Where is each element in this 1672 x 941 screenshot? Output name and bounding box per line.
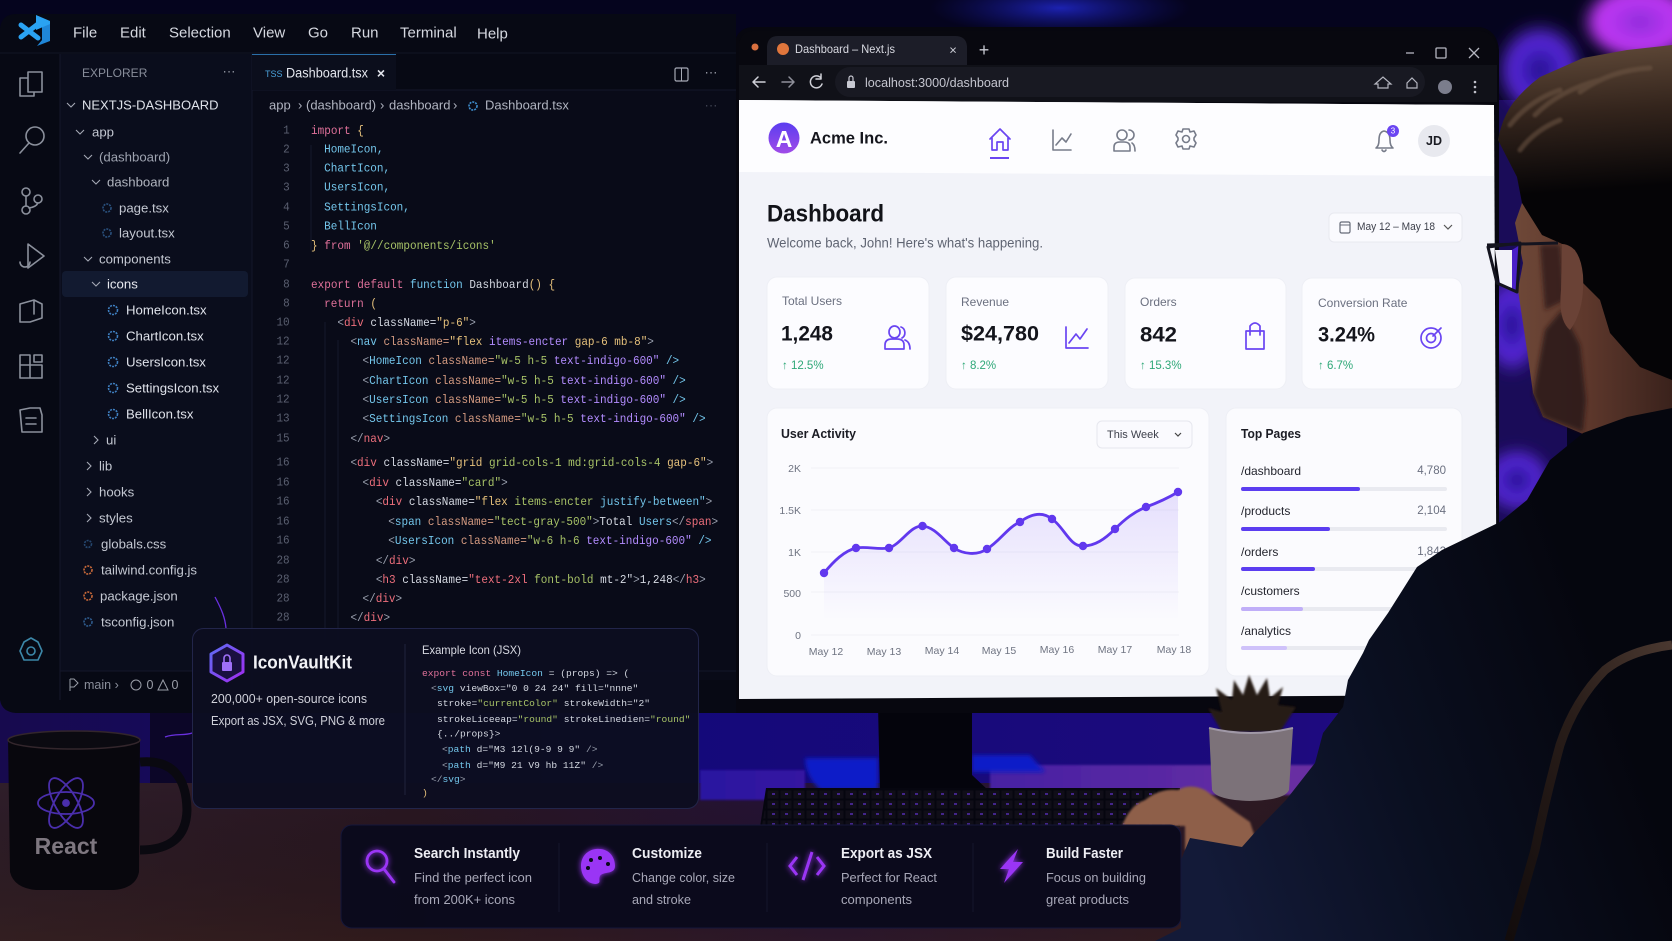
feature: Build Faster: Focus on building (1046, 871, 1146, 885)
lit desk edge (700, 765, 1340, 800)
line numbers: 1 (283, 124, 290, 138)
source lines: <ChartIcon className="w-5 h-5 text-indigo-600" /> (363, 374, 686, 388)
source lines: UsersIcon, (324, 181, 390, 195)
logo: Acme Inc.: Acme Inc. (810, 128, 888, 148)
row: /customers (1241, 584, 1447, 611)
status bar: main › (84, 678, 119, 692)
example code: {../props}> (437, 728, 501, 740)
explorer header: EXPLORER (82, 66, 148, 80)
stat card: Conversion Rate: ↑ 6.7% (1318, 360, 1353, 372)
icon: chart (1066, 327, 1088, 348)
row: /orders: 1,842 (1417, 546, 1446, 558)
hoodie body (1155, 408, 1672, 941)
nav icon: users (1114, 130, 1135, 151)
dropdown: This Week: This Week (1107, 429, 1159, 441)
nav icon: gear (1176, 129, 1196, 149)
feature bar (341, 825, 1181, 928)
menu bar: Go (308, 24, 328, 42)
feature: Customize: Change color, size (632, 871, 735, 885)
line numbers: 12 (276, 374, 290, 388)
coffee mug with React logo: React (35, 833, 98, 859)
file tree: icons (107, 276, 138, 292)
file tree: NEXTJS-DASHBOARD (82, 98, 219, 112)
feature: Search Instantly: Search Instantly (414, 846, 520, 862)
dashboard page background (739, 100, 1497, 699)
date labels: May 17 (1098, 644, 1132, 656)
file tree: components (99, 252, 171, 266)
example code: </svg> (431, 774, 466, 784)
icon: react atom (38, 773, 94, 833)
source lines: <SettingsIcon className="w-5 h-5 text-indigo-600" /> (363, 412, 706, 426)
heading: Dashboard: Welcome back, John! Here's what's happening. (767, 236, 1043, 250)
source lines: </nav> (350, 432, 390, 446)
stat card: Revenue: Revenue (961, 295, 1009, 309)
axis labels (779, 463, 801, 642)
icon: users (885, 326, 910, 349)
line chart (820, 488, 1182, 620)
axis labels: 2K (788, 463, 801, 475)
stat card: Revenue: $24,780 (961, 322, 1039, 346)
date labels: May 14 (925, 645, 959, 657)
line numbers: 12 (276, 335, 290, 349)
line numbers: 12 (276, 354, 290, 368)
file tree: globals.css (101, 536, 167, 552)
status bar (70, 678, 179, 692)
file tree: styles (99, 510, 133, 526)
connector wires (165, 597, 226, 737)
line numbers: 3 (283, 181, 290, 195)
dropdown: This Week (1097, 421, 1192, 448)
file tree: tsconfig.json (101, 614, 174, 630)
source lines: </div> (350, 611, 390, 625)
line numbers: 16 (276, 476, 290, 490)
source lines: <UsersIcon className="w-6 h-6 text-indigo-600" /> (388, 534, 712, 548)
stat card: Conversion Rate (1302, 278, 1462, 389)
row: /orders: /orders (1241, 545, 1278, 559)
source lines: <h3 className="text-2xl font-bold mt-2">1,248</h3> (376, 573, 706, 587)
feature: Customize (581, 846, 735, 907)
date labels: May 12 (809, 646, 843, 658)
breadcrumb: › (380, 98, 384, 112)
line numbers: 6 (283, 239, 290, 253)
browser tab: Dashboard – Next.js (795, 42, 895, 56)
feature: Export as JSX: Perfect for React (841, 871, 938, 885)
source lines (311, 124, 718, 625)
source lines: <div className="card"> (363, 476, 508, 490)
axis labels: 500 (783, 588, 801, 600)
file tree: package.json (100, 588, 178, 604)
breadcrumb: dashboard (389, 98, 450, 112)
axis labels: 1.5K (779, 505, 801, 517)
source lines: export default function Dashboard() { (311, 278, 555, 292)
sideburn (1540, 245, 1565, 310)
address bar (835, 67, 1425, 97)
navigation arrows (753, 74, 822, 88)
source lines: <div className="p-6"> (337, 316, 476, 330)
stat card: Conversion Rate: Conversion Rate (1318, 296, 1408, 310)
file tree: HomeIcon.tsx (126, 302, 207, 318)
stat card: Conversion Rate: 3.24% (1318, 324, 1375, 346)
menu bar: File (73, 24, 97, 42)
code editor content (276, 124, 718, 625)
status bar: 0 (172, 678, 179, 692)
monitor frame (733, 27, 1499, 713)
ear (1560, 244, 1583, 330)
menu bar: Help (477, 26, 508, 42)
blue desk reflections (805, 755, 1045, 790)
example code: Example Icon (JSX) (422, 643, 521, 657)
menu bar: Terminal (400, 24, 457, 42)
notifications bell (1376, 125, 1399, 152)
menu bar: View (253, 24, 285, 42)
coffee mug with React logo (8, 731, 187, 890)
editor tab: × (377, 65, 385, 81)
menu bar: Edit (120, 24, 147, 42)
date labels (809, 644, 1191, 658)
source lines: </div> (376, 554, 416, 568)
icon: shopping bag (1246, 323, 1264, 349)
glasses (1487, 243, 1558, 292)
menu bar: Selection (169, 24, 231, 42)
window controls (1406, 48, 1479, 58)
panel: Top Pages (1226, 408, 1462, 676)
row: /products (1241, 504, 1447, 531)
breadcrumb (269, 98, 718, 112)
line numbers: 5 (283, 220, 290, 234)
line numbers: 12 (276, 393, 290, 407)
example code: <svg viewBox="0 0 24 24" fill="nnne" (431, 682, 638, 694)
logo: Acme Inc. (768, 122, 888, 154)
editor actions: ··· (704, 64, 718, 80)
description: Export as JSX, SVG, PNG & more (211, 714, 385, 728)
avatar JD (1418, 125, 1450, 157)
file tree: lib (99, 458, 112, 474)
feature: Export as JSX: components (841, 893, 912, 907)
source lines: <nav className="flex items-encter gap-6 mb-8"> (350, 335, 654, 349)
file tree: (dashboard) (99, 150, 170, 164)
feature: Customize: and stroke (632, 893, 691, 907)
neck and face (1515, 203, 1672, 434)
file tree: app (92, 124, 114, 140)
monitor stand (878, 705, 990, 792)
breadcrumb: › (453, 98, 457, 112)
breadcrumb: app (269, 98, 291, 112)
source lines: BellIcon (324, 220, 377, 234)
panel: Top Pages: Top Pages (1241, 427, 1301, 441)
example code: strokeLiceeap="round" strokeLinedien="round" (437, 714, 690, 724)
date labels: May 15 (982, 645, 1016, 657)
indent guides (311, 145, 338, 640)
line numbers: 28 (276, 592, 290, 606)
line numbers: 4 (283, 201, 290, 215)
hair (1498, 45, 1672, 380)
line numbers: 16 (276, 534, 290, 548)
line numbers: 10 (276, 316, 290, 330)
row: /orders (1241, 545, 1447, 571)
status bar: 0 (147, 678, 154, 692)
editor window (0, 14, 736, 713)
line numbers: 16 (276, 515, 290, 529)
breadcrumb: › (298, 98, 302, 112)
stat card: Revenue (946, 277, 1108, 389)
line numbers: 16 (276, 456, 290, 470)
line numbers: 8 (283, 278, 290, 292)
stat card: Total Users (767, 277, 929, 389)
source lines: return ( (324, 297, 377, 311)
plant in pot (1208, 675, 1296, 801)
row: /analytics: /analytics (1241, 624, 1291, 638)
menu bar (73, 24, 508, 42)
source lines: </div> (363, 592, 402, 606)
hair strands (1510, 68, 1650, 150)
browser chrome: + (979, 40, 989, 60)
source lines: } from '@//components/icons' (311, 239, 496, 253)
source lines: <div className="flex items-encter justify-between"> (376, 495, 712, 509)
line numbers: 28 (276, 611, 290, 625)
chart card: User Activity: User Activity (781, 427, 856, 441)
date labels: May 18 (1157, 644, 1191, 656)
line numbers: 28 (276, 573, 290, 587)
stat card: Orders (1125, 278, 1286, 389)
chair (1509, 645, 1672, 941)
line numbers: 2 (283, 143, 290, 157)
file tree: SettingsIcon.tsx (126, 380, 219, 396)
browser tab (752, 36, 967, 65)
breadcrumb: Dashboard.tsx (485, 98, 569, 112)
feature: Search Instantly: from 200K+ icons (414, 893, 515, 907)
example code (422, 643, 690, 798)
logo: Acme Inc.: A (776, 126, 792, 152)
line numbers: 28 (276, 554, 290, 568)
panel: IconVaultKit popup (192, 628, 698, 808)
date picker: May 12 – May 18 (1357, 221, 1435, 233)
file tree: UsersIcon.tsx (126, 354, 206, 370)
file tree: dashboard (107, 174, 169, 190)
row: /dashboard (1241, 464, 1447, 491)
feature: Search Instantly: Find the perfect icon (414, 871, 532, 885)
stat card: Orders: Orders (1140, 295, 1177, 309)
feature: Build Faster (1000, 846, 1146, 907)
source lines: <span className="tect-gray-500">Total Users</span> (388, 515, 718, 529)
example code: ) (422, 788, 428, 798)
line numbers: 8 (283, 297, 290, 311)
source lines: ChartIcon, (324, 162, 390, 176)
example code: export const HomeIcon = (props) => ( (422, 668, 629, 678)
chart card: User Activity (767, 408, 1209, 676)
person at desk (1122, 45, 1672, 941)
stat card: Total Users: 1,248 (781, 322, 833, 346)
stat card: Orders: ↑ 15.3% (1140, 360, 1182, 372)
address bar: localhost:3000/dashboard (865, 76, 1009, 90)
file tree: page.tsx (119, 200, 169, 216)
file tree: ui (106, 432, 116, 448)
line numbers: 16 (276, 495, 290, 509)
file tree: layout.tsx (119, 226, 175, 240)
browser chrome (739, 31, 1497, 102)
activity bar icons (20, 72, 44, 660)
file tree (62, 98, 248, 630)
date labels: May 13 (867, 646, 901, 658)
line numbers: 13 (276, 412, 290, 426)
feature: Build Faster: great products (1046, 893, 1129, 907)
feature: Search Instantly (367, 846, 532, 907)
description: 200,000+ open-source icons (211, 692, 367, 706)
notifications bell: 3 (1391, 126, 1396, 136)
row: /products: /products (1241, 504, 1290, 518)
line numbers: 3 (283, 162, 290, 176)
date picker (1329, 213, 1462, 242)
feature: Build Faster: Build Faster (1046, 846, 1123, 862)
explorer header: ··· (222, 64, 236, 78)
example code: <path d="M3 12l(9-9 9 9" /> (442, 744, 598, 754)
line numbers (276, 124, 290, 625)
nav icon: home (990, 129, 1010, 150)
menu bar: Run (351, 24, 379, 42)
axis labels: 1K (788, 547, 801, 559)
date labels: May 16 (1040, 644, 1074, 656)
feature: Export as JSX (790, 846, 938, 907)
file tree: ChartIcon.tsx (126, 328, 204, 344)
stat card: Orders: 842 (1140, 324, 1177, 346)
row: /customers: /customers (1241, 584, 1300, 598)
row: /dashboard: 4,780 (1417, 465, 1446, 477)
avatar JD: JD (1426, 134, 1442, 148)
feature: Export as JSX: Export as JSX (841, 846, 932, 862)
stat card: Total Users: ↑ 12.5% (782, 360, 824, 372)
file tree: tailwind.config.js (101, 562, 197, 578)
icon: target (1421, 328, 1441, 348)
hand (1122, 786, 1256, 850)
file tree: BellIcon.tsx (126, 406, 194, 422)
source lines: <div className="grid grid-cols-1 md:grid-cols-4 gap-6"> (350, 456, 713, 470)
axis labels: 0 (795, 630, 801, 642)
row: /products: 2,104 (1417, 505, 1447, 517)
editor tab: Dashboard.tsx (286, 66, 368, 80)
browser tab: × (949, 42, 957, 58)
feature: Customize: Customize (632, 846, 702, 862)
beard (1533, 310, 1586, 432)
file tree: hooks (99, 484, 135, 500)
stat card: Total Users: Total Users (782, 294, 842, 308)
line numbers: 7 (283, 258, 290, 272)
line numbers: 15 (276, 432, 290, 446)
dashboard nav bar (739, 100, 1494, 176)
source lines: import { (311, 124, 364, 138)
tree chevrons (67, 103, 100, 522)
row: /dashboard: /dashboard (1241, 464, 1301, 478)
editor tab (252, 54, 396, 90)
source lines: SettingsIcon, (324, 201, 410, 215)
vs code logo (21, 15, 50, 46)
nav icon: chart (1053, 130, 1071, 150)
example code: <path d="M9 21 V9 hb 11Z" /> (442, 760, 603, 770)
breadcrumb: (dashboard) (306, 98, 376, 112)
editor actions (675, 64, 718, 81)
icon: hexagon lock (211, 645, 243, 681)
stat card: Revenue: ↑ 8.2% (961, 360, 996, 372)
heading: Dashboard: Dashboard (767, 200, 884, 228)
keyboard (760, 788, 1180, 827)
source lines: <HomeIcon className="w-5 h-5 text-indigo-600" /> (363, 354, 679, 368)
source lines: HomeIcon, (324, 143, 384, 157)
editor tab: TSS (265, 69, 283, 79)
title: IconVaultKit: IconVaultKit (253, 652, 352, 672)
description (211, 692, 385, 728)
heading: Dashboard (767, 200, 1043, 250)
tree file icons (84, 204, 118, 626)
row: /analytics (1241, 624, 1447, 650)
breadcrumb: ··· (704, 98, 718, 112)
explorer header (82, 64, 236, 80)
source lines: <UsersIcon className="w-5 h-5 text-indigo-600" /> (363, 393, 686, 407)
example code: stroke="currentColor" strokeWidth="2" (437, 698, 650, 708)
